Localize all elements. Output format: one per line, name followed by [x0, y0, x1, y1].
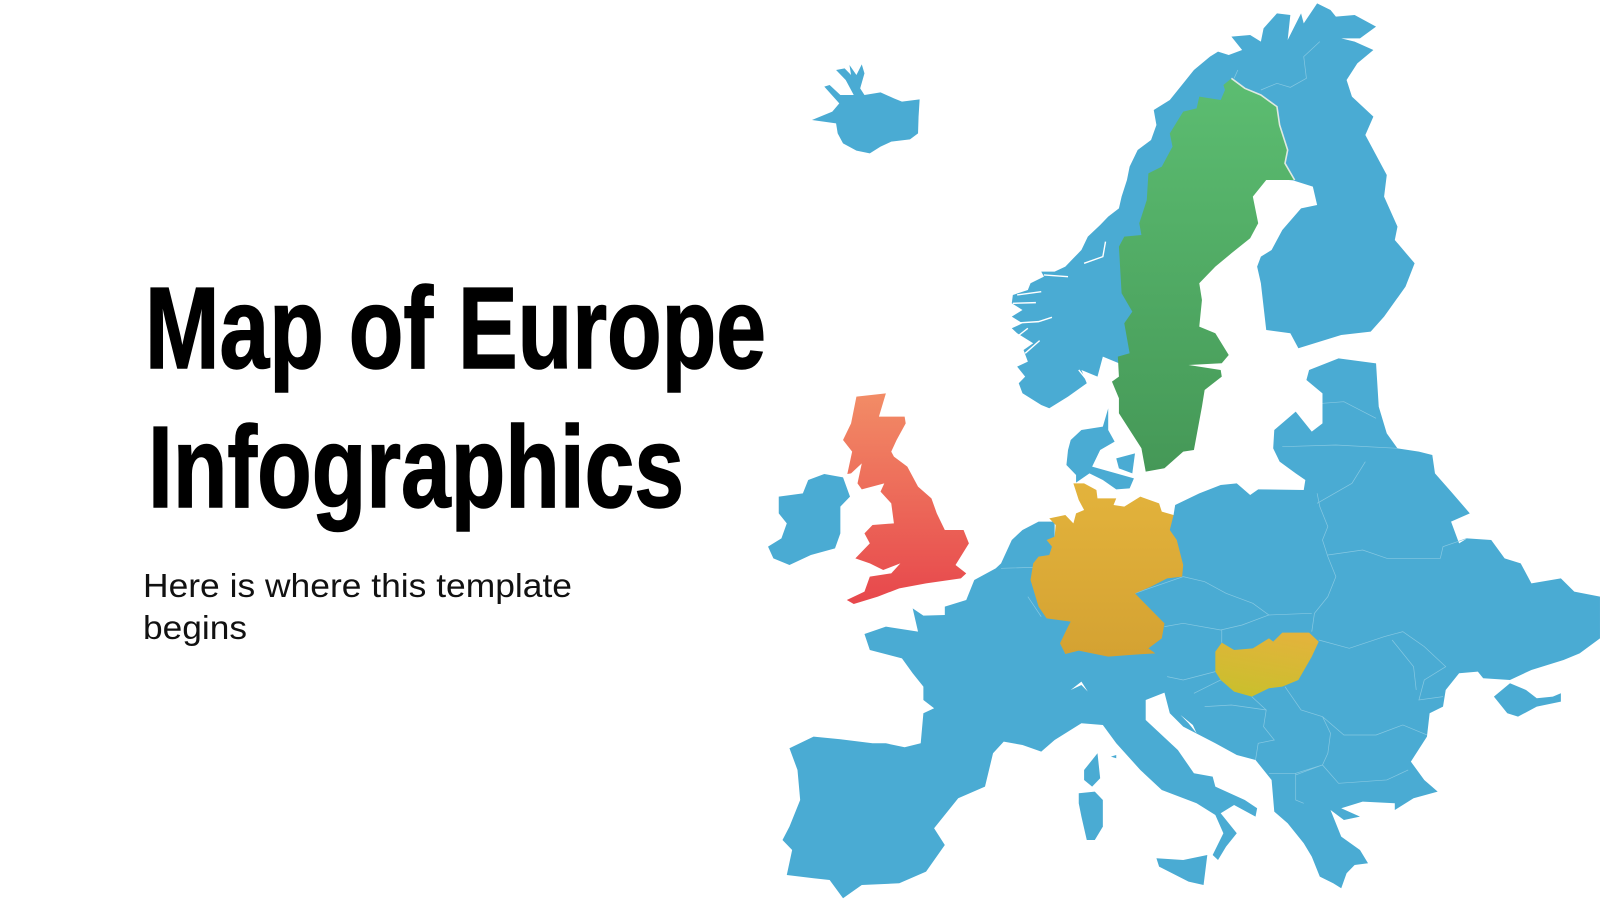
subtitle: begins: [143, 609, 247, 646]
Sweden–Finland border: [1231, 78, 1295, 180]
Denmark: [1066, 408, 1135, 489]
Norway and Finland: [1012, 3, 1415, 408]
Iceland: [812, 64, 920, 153]
continental Europe: [782, 358, 1600, 898]
country borders: [1001, 402, 1467, 803]
title: Infographics: [148, 402, 684, 532]
Adriatic islands gap: [1071, 682, 1197, 733]
United Kingdom: [843, 393, 969, 604]
subtitle: [143, 567, 572, 646]
Sweden: [1112, 78, 1295, 472]
map of Europe: [768, 3, 1600, 898]
Norway–Finland border: [1234, 42, 1320, 90]
Hungary: [1215, 633, 1319, 697]
title: Map of Europe: [145, 263, 766, 393]
Crimea: [1494, 683, 1561, 717]
Mediterranean islands: [1079, 753, 1207, 885]
Ireland: [768, 474, 850, 565]
title: [145, 263, 766, 532]
subtitle: Here is where this template: [143, 567, 572, 604]
Germany: [1031, 483, 1183, 657]
